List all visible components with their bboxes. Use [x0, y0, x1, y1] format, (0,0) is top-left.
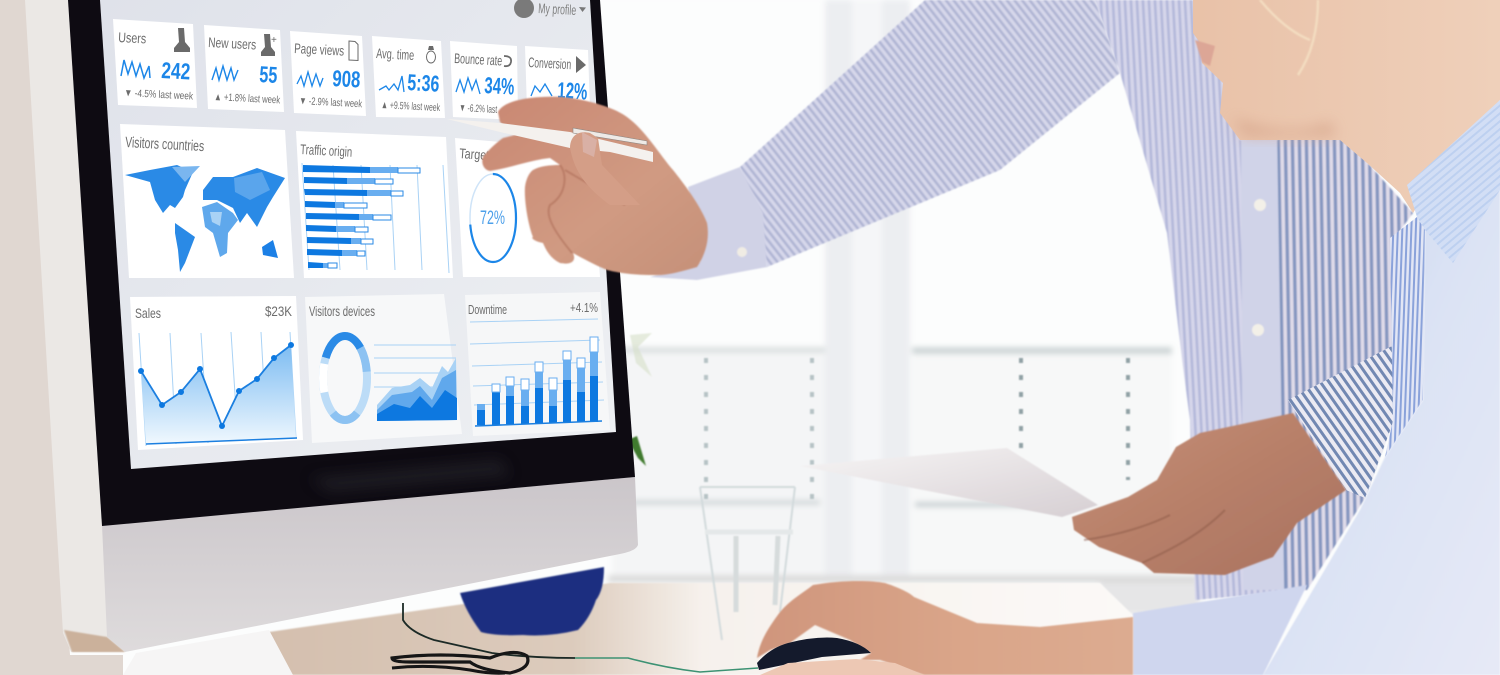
panel: sales line chart — [130, 296, 303, 450]
tile: bounce rate: 34% — [484, 72, 515, 100]
tile: page views: ▼ -2.9% last week — [299, 95, 363, 110]
man: pointing hand — [482, 97, 708, 275]
panel: sales line chart: Sales — [135, 305, 161, 321]
man: thumb — [570, 132, 640, 205]
wall — [0, 0, 123, 675]
railing posts — [706, 358, 1128, 500]
tile: users: 242 — [161, 57, 191, 85]
man: shirt arm — [740, 0, 1120, 267]
woman: striped blouse placket — [1385, 217, 1425, 457]
panel: visitors countries — [120, 124, 294, 278]
panel: target gauge: 72% — [480, 208, 505, 229]
world map — [125, 165, 285, 272]
profile menu: My profile — [538, 0, 577, 18]
tile: users: ▼ -4.5% last week — [124, 87, 194, 103]
hand creases — [549, 165, 625, 253]
man: shirt cuff — [650, 167, 767, 280]
tile: new users: + — [271, 35, 277, 46]
panel: traffic origin: Traffic origin — [300, 141, 353, 160]
woman: neck and face — [1160, 0, 1500, 213]
man: striped sleeve near hand — [1288, 345, 1394, 498]
lips — [1195, 40, 1215, 66]
plant leaves — [628, 333, 652, 466]
panel: downtime bar chart: +4.1% — [570, 300, 598, 315]
woman: shirt body — [1263, 160, 1500, 675]
shirt buttons — [1252, 199, 1266, 336]
tile: page views — [290, 31, 366, 116]
woman: lower finger — [760, 659, 924, 675]
panel: target gauge: Target — [459, 145, 490, 163]
panel: visitors countries: Visitors countries — [125, 134, 205, 155]
computer mouse — [757, 638, 871, 670]
tile: conversion — [525, 46, 590, 110]
blue vase — [460, 567, 604, 635]
horizontal bar chart — [303, 165, 420, 268]
panel: visitors devices — [305, 294, 462, 443]
profile menu — [514, 0, 586, 18]
monitor bezel — [68, 0, 635, 526]
donut chart — [323, 336, 367, 420]
dashboard — [113, 0, 610, 450]
sheet of paper — [800, 448, 1098, 517]
tile: average time — [372, 36, 445, 118]
panel: target gauge — [455, 138, 600, 277]
tile: bounce rate: ▼ -6.2% last — [459, 102, 497, 116]
tile: conversion: Conversion — [528, 54, 572, 72]
man: shirt torso — [1095, 0, 1413, 600]
woman: shirt collar — [1407, 100, 1500, 263]
tile: users — [113, 19, 197, 108]
panel: downtime bar chart: Downtime — [468, 302, 507, 317]
panel: visitors devices: Visitors devices — [309, 303, 375, 319]
hair strands — [1260, 0, 1318, 75]
tile: bounce rate — [450, 41, 518, 120]
jaw shadow — [1232, 118, 1336, 136]
man: hand holding paper — [1072, 413, 1346, 575]
woman: sleeve — [1133, 585, 1307, 675]
finger creases — [1084, 510, 1225, 563]
cable and glasses on desk — [392, 603, 758, 673]
tile: new users: 55 — [259, 61, 278, 88]
tile: conversion: 12% — [557, 77, 588, 105]
tile: users: Users — [118, 29, 147, 46]
tile: bounce rate: Bounce rate — [454, 50, 503, 69]
tile: average time: Avg. time — [376, 45, 415, 63]
woman: hand on mouse — [757, 581, 1133, 675]
desk — [269, 583, 1135, 675]
monitor casing — [25, 0, 638, 652]
tile: page views: 908 — [332, 65, 361, 92]
pen — [447, 119, 653, 162]
water glass — [700, 487, 795, 640]
area chart — [374, 345, 457, 421]
panel: downtime bar chart — [465, 292, 610, 436]
panel: sales line chart: $23K — [265, 303, 293, 319]
tile: average time: ▲ +9.5% last week — [381, 99, 441, 114]
tile: new users — [204, 25, 284, 112]
monitor stand — [123, 630, 293, 675]
tile: average time: 5:36 — [407, 69, 440, 97]
screen — [100, 0, 616, 469]
panel: traffic origin — [296, 131, 453, 278]
tile: page views: Page views — [294, 40, 345, 59]
tile: new users: ▲ +1.8% last week — [214, 91, 281, 106]
tile: new users: New users — [208, 34, 257, 53]
